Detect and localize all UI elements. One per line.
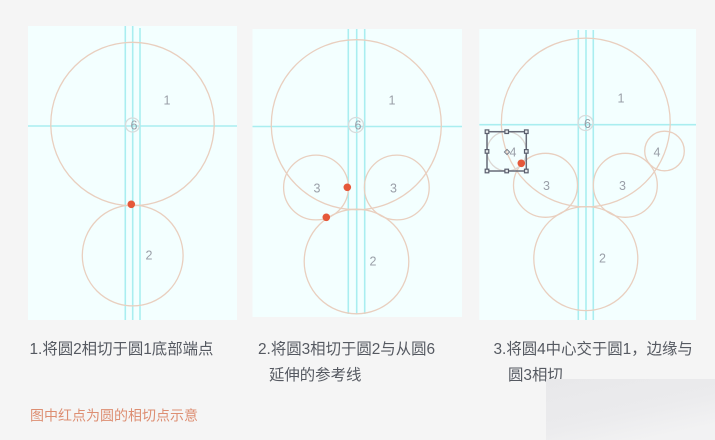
number labels: 3: [619, 179, 626, 193]
circle 1: [271, 40, 441, 210]
caption: step 1: 1.将圆2相切于圆1底部端点: [30, 340, 213, 358]
right circle 3: [593, 153, 657, 217]
circle 1: [51, 42, 214, 206]
number labels: 4: [510, 146, 517, 160]
panel: step 2 diagram: [252, 29, 462, 317]
selection box around circle 4: [485, 130, 528, 173]
left circle 4: [487, 132, 526, 171]
number labels: 2: [599, 252, 606, 266]
caption: step 2: [258, 340, 435, 384]
circle 6: [126, 118, 140, 132]
right circle 4: [645, 131, 684, 171]
left circle 3: [284, 155, 348, 220]
number labels: 1: [164, 94, 171, 108]
number labels: 2: [146, 248, 153, 262]
panel: step 1 diagram: [28, 26, 237, 320]
note: red dot explanation: 图中红点为圆的相切点示意: [30, 408, 198, 424]
circle 2: [82, 205, 183, 306]
number labels: 6: [584, 117, 591, 131]
number labels: 1: [389, 94, 396, 108]
caption: step 3: 3.将圆4中心交于圆1，边缘与: [494, 340, 693, 358]
red tangent point: [128, 200, 135, 208]
red tangent point: [518, 160, 525, 167]
circle 6: [578, 116, 593, 130]
caption: step 2: 延伸的参考线: [269, 366, 361, 384]
number labels: 3: [314, 182, 321, 196]
number labels: 2: [370, 254, 377, 268]
number labels: 6: [131, 118, 138, 132]
number labels: [314, 94, 397, 268]
circle 2: [304, 209, 409, 314]
caption: step 2: 2.将圆3相切于圆2与从圆6: [258, 340, 435, 358]
red tangent points: [322, 184, 351, 221]
number labels: 1: [618, 92, 625, 106]
right circle 3: [364, 155, 429, 220]
number labels: 4: [654, 146, 661, 160]
number labels: [131, 94, 171, 262]
number labels: 6: [355, 118, 362, 132]
circle 1: [501, 38, 670, 207]
number labels: 3: [390, 182, 397, 196]
blurred watermark patch: [546, 379, 715, 440]
circle 6: [348, 118, 364, 132]
panel: step 3 diagram: [479, 29, 696, 320]
left circle 3: [514, 153, 578, 217]
number labels: [510, 92, 661, 266]
number labels: 3: [543, 179, 550, 193]
circle 2: [534, 207, 638, 311]
caption: step 3: 圆3相切: [508, 366, 563, 384]
caption: step 3: [494, 340, 693, 384]
